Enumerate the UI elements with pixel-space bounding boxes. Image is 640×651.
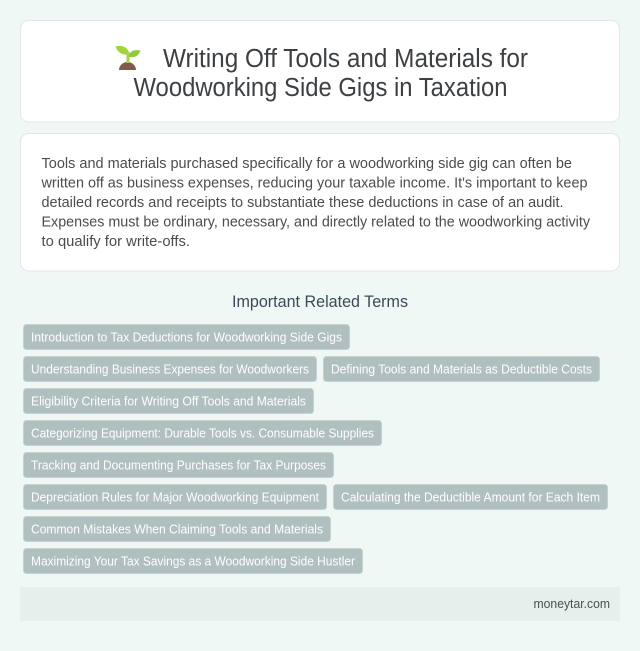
- tag 8: Calculating the Deductible Amount for Each Item: [341, 490, 600, 504]
- tag 3: [324, 356, 600, 382]
- tag 7: [24, 484, 326, 510]
- tag 1: [24, 324, 350, 350]
- panel: description card: [20, 134, 620, 271]
- description text: to qualify for write-offs.: [42, 234, 190, 250]
- footer source text: moneytar.com: [534, 597, 610, 611]
- icon: sprout: [116, 46, 140, 70]
- tag 9: [24, 516, 330, 542]
- title: Woodworking Side Gigs in Taxation: [134, 74, 508, 102]
- description text: written off as business expenses, reducing your taxable income. It's important to keep: [41, 176, 588, 192]
- tags: related terms: [24, 324, 608, 574]
- title: Writing Off Tools and Materials for: [163, 45, 528, 73]
- tag 2: [24, 356, 316, 382]
- tag 6: Tracking and Documenting Purchases for Tax Purposes: [31, 458, 326, 472]
- description text: detailed records and receipts to substantiate these deductions in case of an audit.: [42, 195, 564, 211]
- description text: Expenses must be ordinary, necessary, and directly related to the woodworking activity: [42, 214, 591, 230]
- panel: title card: [20, 20, 620, 122]
- title: [134, 45, 528, 102]
- tag 1: Introduction to Tax Deductions for Woodworking Side Gigs: [31, 330, 342, 344]
- tag 4: Eligibility Criteria for Writing Off Tools and Materials: [31, 394, 306, 408]
- tag 3: Defining Tools and Materials as Deductible Costs: [331, 362, 592, 376]
- tag 7: Depreciation Rules for Major Woodworking Equipment: [31, 490, 319, 504]
- description text: [41, 156, 591, 250]
- tag 5: Categorizing Equipment: Durable Tools vs. Consumable Supplies: [31, 426, 374, 440]
- tag 4: [24, 388, 314, 414]
- tag 9: Common Mistakes When Claiming Tools and Materials: [31, 522, 323, 536]
- tag 2: Understanding Business Expenses for Woodworkers: [31, 362, 309, 376]
- heading: important related terms: Important Related Terms: [232, 293, 408, 311]
- footer: [20, 587, 620, 621]
- tag 10: Maximizing Your Tax Savings as a Woodworking Side Hustler: [31, 554, 356, 568]
- tag 8: [334, 484, 608, 510]
- tag 6: [24, 452, 334, 478]
- tag 5: [24, 420, 382, 446]
- description text: Tools and materials purchased specifically for a woodworking side gig can often be: [42, 156, 572, 172]
- tag 10: [24, 548, 362, 574]
